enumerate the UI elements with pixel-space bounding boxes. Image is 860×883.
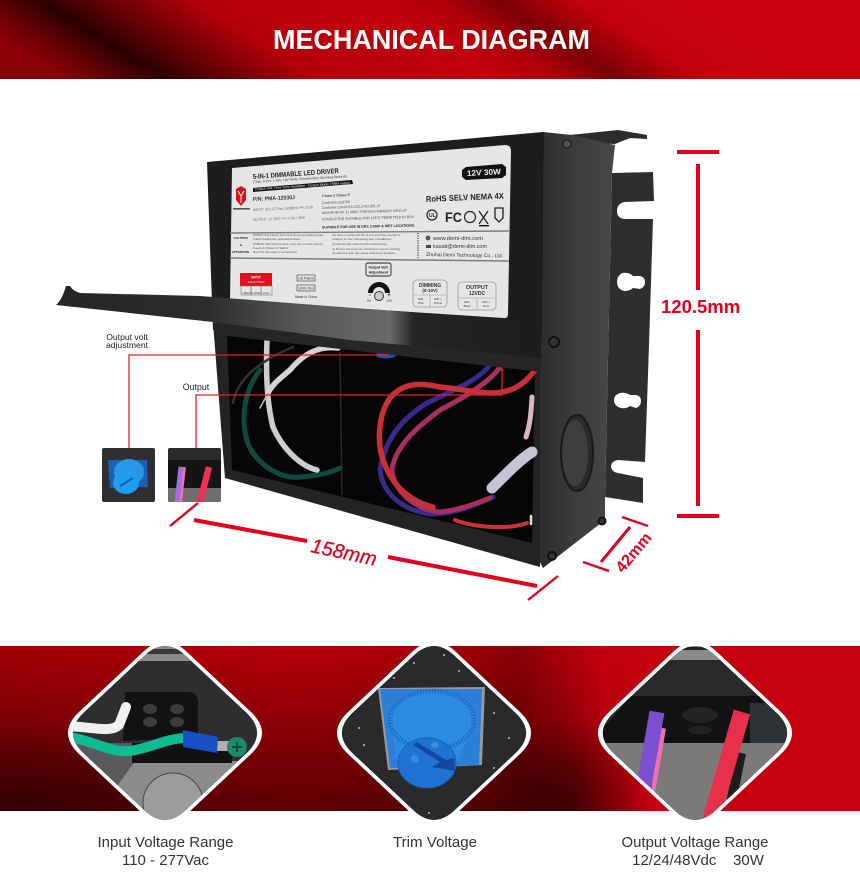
dimming box: Pink xyxy=(418,301,424,305)
input wiring tag: Green xyxy=(262,291,270,295)
feature diamond: input voltage xyxy=(68,646,262,820)
input wires: white, green, black xyxy=(233,340,340,477)
knockout hole xyxy=(561,415,593,491)
compliance text: Conforme CAN/CSA-C22.2 NO.250.13 xyxy=(322,204,380,210)
header banner xyxy=(0,0,860,79)
caption: output voltage range: Output Voltage Range xyxy=(622,834,768,851)
side end plate xyxy=(532,132,615,568)
dimming box: (0-10V) xyxy=(422,288,438,293)
caption: input voltage range: 110 - 277Vac xyxy=(122,852,209,869)
caption: trim voltage: Trim Voltage xyxy=(393,834,477,851)
dimming box: DIM + xyxy=(434,297,442,301)
patent tags: Made in China xyxy=(295,295,317,299)
output box: Black xyxy=(464,304,471,308)
enclosure lower frame xyxy=(213,322,540,567)
output volt adjustment mark xyxy=(366,263,393,303)
patent tags: 100% Dim xyxy=(298,286,314,290)
wattage badge xyxy=(462,164,506,180)
feature diamond: output voltage xyxy=(598,646,792,820)
part number: P/N: PMA-12030J xyxy=(253,195,295,203)
certifications: FC xyxy=(445,209,462,225)
front panel xyxy=(207,132,543,345)
folded-down lid xyxy=(56,286,541,358)
patent tags xyxy=(295,275,317,299)
contact info: kasati@demi-dim.com xyxy=(433,244,487,250)
contact info xyxy=(426,236,503,259)
value: 158mm xyxy=(309,535,379,571)
contact info: Zhuhai Demi Technology Co., Ltd. xyxy=(426,252,503,259)
output volt adjustment mark: 9V xyxy=(367,299,372,303)
output volt adjustment mark: 13V xyxy=(386,299,393,303)
product name: 5-IN-1 DIMMABLE LED DRIVER xyxy=(253,168,339,181)
compliance text: MAXIMUM OF 12 AWG THROUGH BRANCH CIRCUIT xyxy=(322,209,408,215)
title: MECHANICAL DIAGRAM xyxy=(273,24,590,55)
wiring compartment interior xyxy=(227,335,535,543)
annotation line: output volt adjustment xyxy=(129,354,388,448)
rear mounting flange with slots xyxy=(605,172,654,503)
input wiring tag: L Black xyxy=(242,291,251,295)
compliance text: CONDUCTOR SUITABLE FOR 105°C PERMITTED IN BOX xyxy=(322,215,415,221)
output box: Red xyxy=(483,304,489,308)
feature band xyxy=(0,646,860,811)
output box xyxy=(458,282,496,310)
caution block: Mount this unit outdoor or wet approved. xyxy=(253,251,297,254)
output box: LED- xyxy=(464,300,470,304)
caution block: interference that may cause undesired operation. xyxy=(332,252,396,255)
caution block: WARNING: Risk of Electric Shock. Mount this unit on a straight grounded xyxy=(253,234,324,237)
output volt adjustment mark: + xyxy=(387,293,391,299)
label: output: Output xyxy=(183,382,210,392)
certifications: RoHS SELV NEMA 4X xyxy=(426,191,504,204)
output box: OUTPUT xyxy=(466,285,489,291)
thumbnail: output wires xyxy=(168,448,221,502)
caution block: This device is complies with Part 15 of the FCC Rules. Operation is xyxy=(332,234,401,237)
output box: LED + xyxy=(482,300,490,304)
product photo: LED driver enclosure xyxy=(56,130,654,568)
caution block: subject to the following two conditions: xyxy=(332,238,393,241)
caution block xyxy=(232,234,401,255)
output wires: red, purple, pink xyxy=(379,365,535,527)
contact info: www.demi-dim.com xyxy=(433,236,483,242)
label: output volt adjustment: adjustment xyxy=(106,340,149,350)
output mode pill: Output Volt. Fine-Tune Available · Output Mode: PWM output xyxy=(255,181,350,191)
caution block: & xyxy=(240,243,243,247)
wattage badge: 12V 30W xyxy=(467,167,502,178)
caption: output voltage range: 12/24/48Vdc 30W xyxy=(632,852,765,869)
dimension: height 120.5mm xyxy=(661,150,740,518)
certifications: UL xyxy=(429,213,436,219)
label: output volt adjustment: Output volt xyxy=(106,332,148,342)
annotation line: output xyxy=(196,369,503,448)
thumbnail: trim knob xyxy=(102,448,155,502)
output box: 12VDC xyxy=(469,291,485,297)
dimming box: DIMMING xyxy=(419,283,441,289)
dimming box: Purple xyxy=(434,301,442,305)
caution block: (2) Device must accept any interference received, including xyxy=(332,248,401,251)
caution block: Keep it Class II SELV. xyxy=(253,247,290,250)
product label sticker: (Triac, 0-10V, 1-10V, 10V PWM, Potentiometer Dimming Optional) xyxy=(253,174,347,184)
caution block: ATTENTION xyxy=(232,250,249,254)
output volt adjustment mark: Adjustment xyxy=(369,270,389,274)
label dividers xyxy=(230,231,510,261)
dimension: length 158mm xyxy=(170,503,558,600)
hinge strip xyxy=(213,322,541,372)
patent tags: US Patent xyxy=(298,276,314,280)
compliance text xyxy=(322,193,415,229)
input wiring tag xyxy=(240,273,272,295)
dimming box xyxy=(413,280,447,307)
top flange sliver xyxy=(570,130,647,144)
dimension: depth 42mm xyxy=(583,517,656,576)
compliance text: SUITABLE FOR USE IN DRY, CAMP & WET LOCATIONS. xyxy=(322,224,415,229)
value: 42mm xyxy=(613,530,656,576)
caution block: WARNING: Risk of Electric Shock. Verify only to a wired protective xyxy=(253,243,324,246)
product label sticker: INPUT: 110-277Vac, 50/60Hz PF: 0.95 xyxy=(253,205,313,212)
input wiring tag: INPUT xyxy=(251,276,261,280)
caution block: CAUTION xyxy=(234,236,248,240)
caution block: branch before the potential surface. xyxy=(253,238,301,241)
input wiring tag: 110-277VAC xyxy=(248,280,265,284)
trim potentiometer knob xyxy=(376,352,396,358)
output volt adjustment mark: Output Volt. xyxy=(368,266,389,270)
feature diamond: trim voltage xyxy=(337,646,531,820)
compliance text: Class 2 Class P xyxy=(322,193,351,198)
caption: input voltage range: Input Voltage Range xyxy=(98,834,234,851)
product label sticker xyxy=(230,145,511,318)
compliance text: Conforme UL8750 xyxy=(322,200,350,205)
input wiring tag: N White xyxy=(251,291,261,295)
value: 120.5mm xyxy=(661,296,740,317)
dimming box: DIM- xyxy=(418,297,424,301)
logo xyxy=(233,186,250,210)
screws xyxy=(563,140,571,148)
product label sticker: OUTPUT: 12 VDC === 2.5A / 30W xyxy=(253,216,306,222)
caution block: (1) Device will cause harmful interference. xyxy=(332,243,388,246)
certifications xyxy=(426,191,504,226)
output volt adjustment mark: - xyxy=(369,293,371,299)
compartment divider xyxy=(340,352,342,495)
